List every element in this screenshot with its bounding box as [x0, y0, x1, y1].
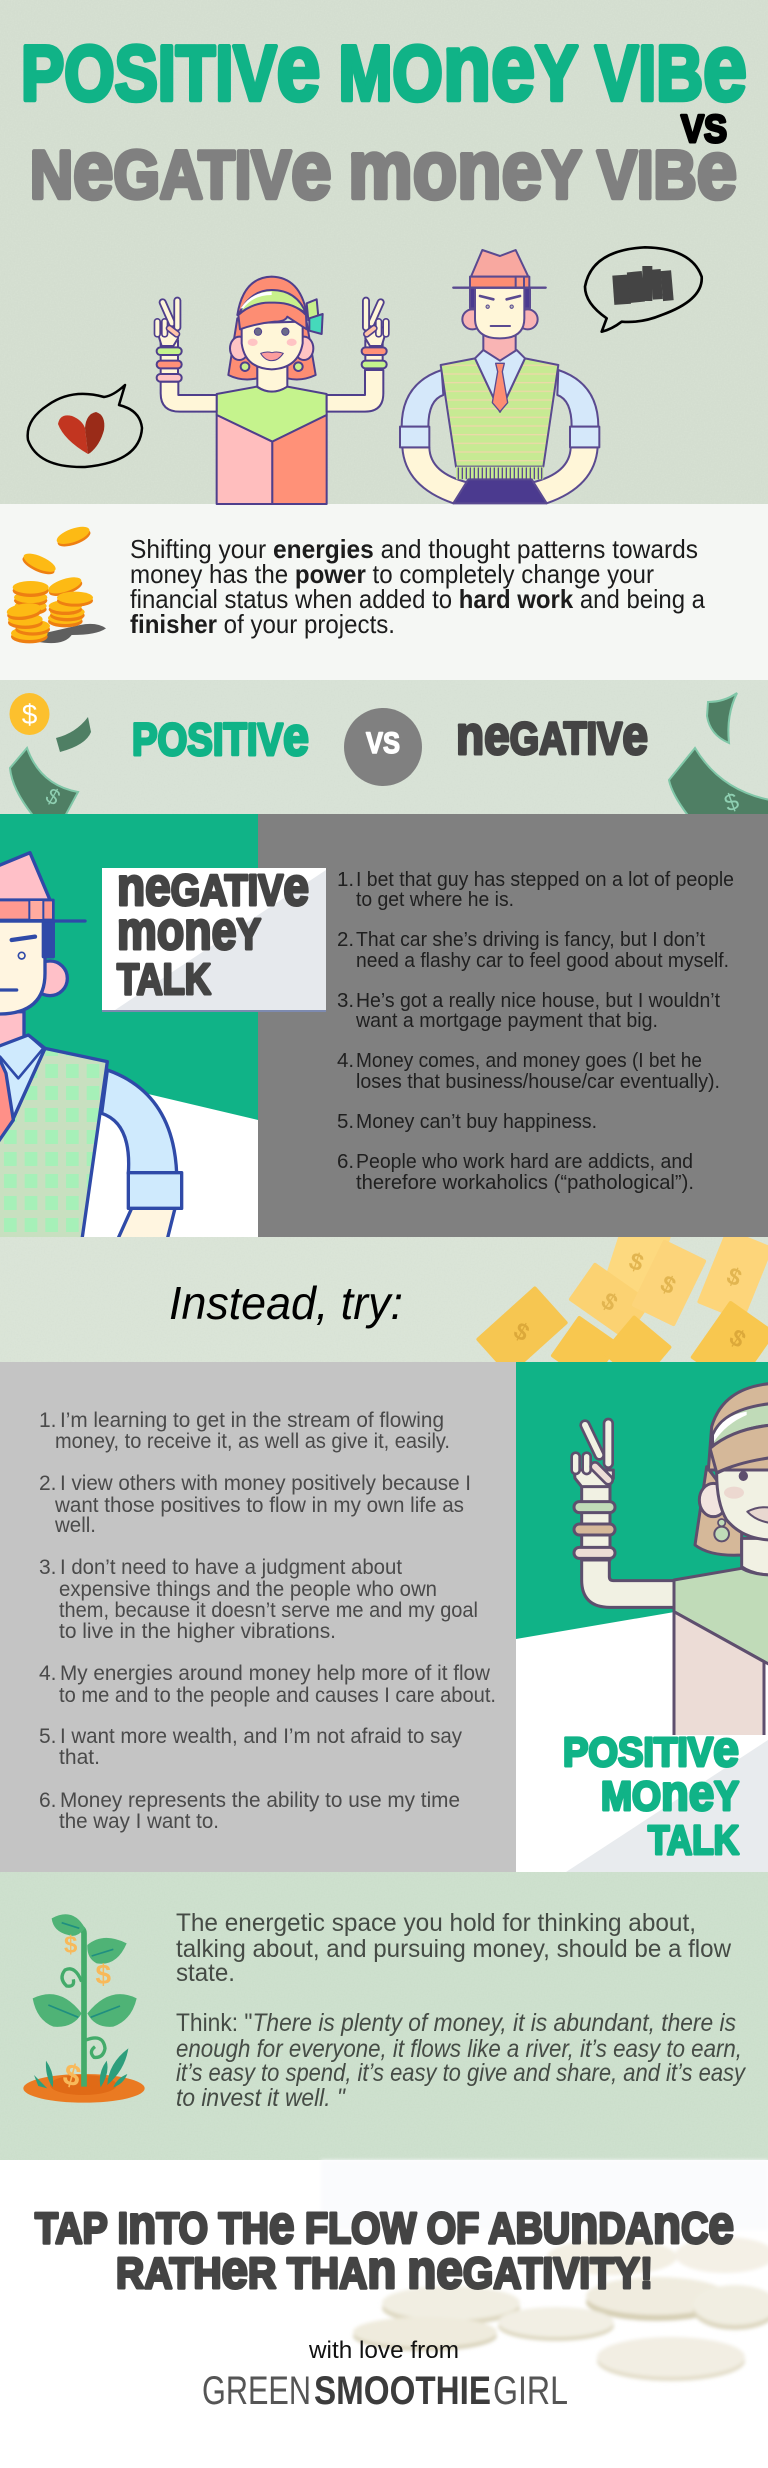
intro text: finisher of your projects. — [130, 609, 395, 639]
item 6: 6. — [337, 1150, 354, 1173]
item 6: Money represents the ability to use my time — [60, 1789, 460, 1812]
item 1: to get where he is. — [356, 888, 514, 911]
logo: green smoothie girl — [202, 2369, 568, 2413]
icon: money plant: $ — [64, 1932, 77, 1959]
icons: falling yellow bills: $ — [596, 1287, 623, 1317]
item 3: want a mortgage payment that big. — [355, 1009, 658, 1032]
item 2: I view others with money positively because I — [60, 1472, 471, 1495]
icon: money plant: $ — [96, 1959, 112, 1990]
text: with love from: with love from — [308, 2337, 459, 2364]
panel: negative money talk — [0, 814, 768, 1242]
item 6: therefore workaholics (“pathological”). — [356, 1171, 694, 1194]
item 1: money, to receive it, as well as give it, easily. — [55, 1430, 450, 1453]
item 2: 2. — [337, 928, 354, 951]
label: negative: neGATIVe — [456, 704, 648, 766]
item 2 — [337, 928, 729, 972]
item 5: that. — [59, 1746, 100, 1769]
item 4: My energies around money help more of it flow — [60, 1662, 491, 1685]
item 3 — [337, 989, 720, 1032]
icons: falling yellow bills: $ — [656, 1270, 680, 1301]
illustration: woman making peace signs — [157, 277, 387, 504]
item 5: Money can’t buy happiness. — [356, 1110, 597, 1133]
photo: blurred coins — [321, 2160, 768, 2381]
item 3: 3. — [39, 1556, 57, 1579]
intro text: Shifting your energies and thought patterns towards — [130, 534, 698, 564]
item 2: need a flashy car to feel good about myself. — [356, 949, 729, 972]
headline: rather than negativity: RATHeR THAn neGATIVITY! — [116, 2240, 653, 2300]
title: vs: VS — [681, 108, 727, 151]
label: positive: POSITIVe — [132, 705, 309, 767]
panel: positive money talk — [0, 1362, 768, 1872]
item 6: the way I want to. — [59, 1810, 219, 1833]
item 6: People who work hard are addicts, and — [356, 1150, 693, 1173]
item 5: I want more wealth, and I’m not afraid to say — [60, 1725, 462, 1748]
flow state text: The energetic space you hold for thinking about, — [176, 1909, 696, 1937]
item 1: I bet that guy has stepped on a lot of people — [356, 868, 734, 891]
item 4 — [337, 1049, 720, 1093]
flow state text: Think: "There is plenty of money, it is abundant, there is — [176, 2009, 736, 2037]
heading card: negative money talk — [102, 857, 326, 1012]
item 1 — [39, 1409, 450, 1453]
icon: dollar coin: $ — [22, 699, 38, 730]
panel: positive vs negative banner — [10, 693, 768, 818]
item 3: I don’t need to have a judgment about — [60, 1556, 402, 1579]
panel: intro — [6, 523, 705, 643]
flow state text: talking about, and pursuing money, should be a flow — [176, 1935, 732, 1963]
item 6 — [337, 1150, 694, 1194]
icons: falling yellow bills: $ — [509, 1317, 534, 1348]
heading: positive money talk: MOneY — [601, 1765, 739, 1821]
item 2 — [39, 1472, 471, 1537]
icons: falling yellow bills: $ — [724, 1324, 751, 1354]
speech bubble: scribble — [585, 247, 702, 332]
speech bubble: heart — [28, 385, 142, 467]
flow state text: to invest it well. " — [176, 2084, 346, 2112]
icons: flying bills — [10, 693, 768, 818]
icon: scribble — [612, 266, 674, 305]
panel: flow state — [23, 1909, 746, 2112]
badge: vs — [344, 708, 422, 786]
flow state text — [176, 1909, 746, 2112]
heading: positive money talk — [563, 1721, 768, 1872]
item 4 — [39, 1662, 496, 1707]
icons: falling yellow bills — [476, 1237, 768, 1362]
item 3: He’s got a really nice house, but I wouldn’t — [356, 989, 720, 1012]
item 6 — [39, 1789, 460, 1833]
icon: heart — [58, 412, 104, 454]
item 2: That car she’s driving is fancy, but I don’t — [356, 928, 705, 951]
headline: tap into the flow: TAP InTO THe FLOW OF ABUnDAnCe — [35, 2195, 734, 2255]
item 5: 5. — [337, 1110, 354, 1133]
item 4: 4. — [337, 1049, 354, 1072]
icon: gold coins — [6, 523, 106, 643]
logo: green smoothie girl: SMOOTHIE — [314, 2369, 491, 2413]
intro text: money has the power to completely change your — [130, 559, 654, 589]
item 3: to live in the higher vibrations. — [59, 1620, 336, 1643]
item 1: 1. — [337, 868, 354, 891]
heading: positive money talk: TALK — [648, 1817, 739, 1863]
illustration: man in hat and vest — [400, 250, 599, 503]
item 4: loses that business/house/car eventually). — [356, 1070, 720, 1093]
item 2: well. — [54, 1514, 96, 1537]
item 4: 4. — [39, 1662, 57, 1685]
list: positive statements — [39, 1409, 496, 1833]
item 3: 3. — [337, 989, 354, 1012]
illustration: man close-up — [0, 853, 182, 1242]
item 3: them, because it doesn’t serve me and my goal — [59, 1599, 478, 1622]
badge: vs: VS — [366, 727, 400, 760]
intro text — [130, 534, 705, 639]
icon: dollar coin — [10, 693, 50, 735]
icons: flying bills: $ — [721, 788, 743, 818]
item 3: expensive things and the people who own — [59, 1578, 437, 1601]
icon: money plant — [23, 1914, 145, 2103]
icon: money plant: $ — [60, 2058, 85, 2094]
item 4: to me and to the people and causes I care about. — [59, 1684, 496, 1707]
heading card: negative money talk: moneY — [117, 901, 261, 961]
flow state text: state. — [176, 1959, 235, 1987]
item 3 — [39, 1556, 478, 1643]
logo: green smoothie girl: GIRL — [493, 2369, 568, 2413]
item 5: 5. — [39, 1725, 57, 1748]
item 1: I’m learning to get in the stream of flowing — [60, 1409, 444, 1432]
list: negative statements — [337, 868, 734, 1194]
icons: falling yellow bills: $ — [626, 1247, 647, 1277]
heading: instead, try: Instead, try: — [169, 1277, 403, 1329]
item 2: 2. — [39, 1472, 57, 1495]
item 1: 1. — [39, 1409, 57, 1432]
item 4: Money comes, and money goes (I bet he — [356, 1049, 702, 1072]
icons: flying bills: $ — [42, 783, 65, 810]
panel: instead, try — [170, 1237, 768, 1362]
panel: closing — [35, 2160, 768, 2413]
heading: positive money talk: POSITIVe — [563, 1721, 739, 1777]
item 2: want those positives to flow in my own life as — [54, 1494, 464, 1517]
item 6: 6. — [39, 1789, 57, 1812]
title: positive money vibe: POSITIVe MOneY VIBe — [21, 15, 747, 121]
item 1 — [337, 868, 734, 911]
logo: green smoothie girl: GREEN — [202, 2369, 311, 2413]
illustration: woman close-up — [574, 1383, 768, 1740]
intro text: financial status when added to hard work and being a — [130, 584, 705, 614]
title: negative money vibe: NeGATIVe moneY VIBe — [30, 123, 737, 216]
heading card: negative money talk: neGATIVe — [117, 857, 309, 917]
heading card: negative money talk: TALK — [117, 955, 211, 1004]
icons: falling yellow bills: $ — [723, 1262, 746, 1293]
item 5 — [39, 1725, 462, 1769]
